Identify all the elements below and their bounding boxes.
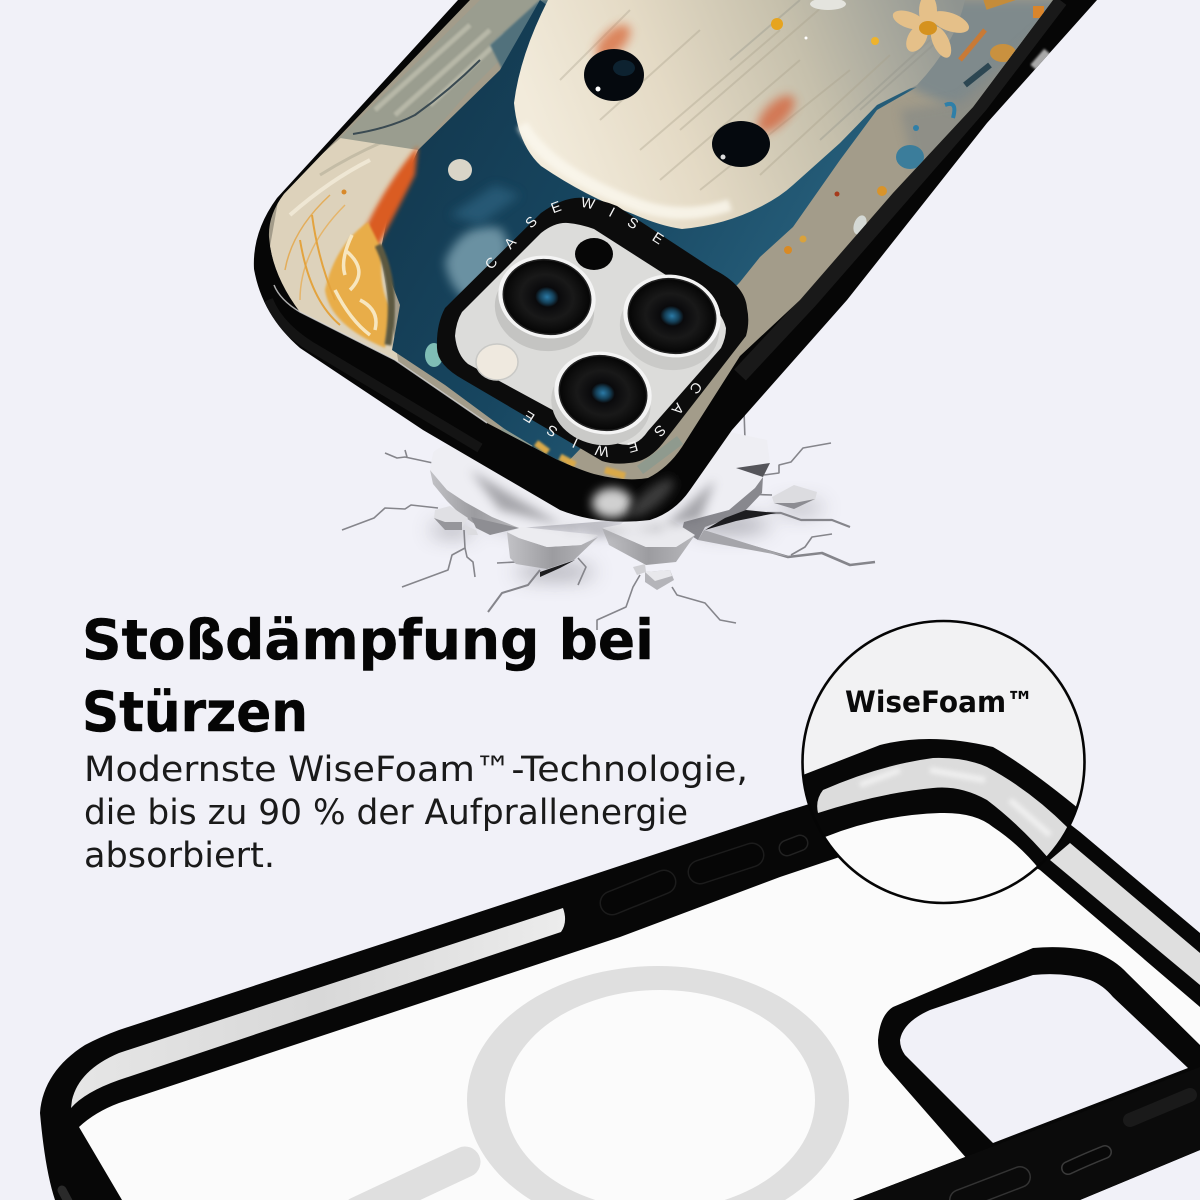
logo text on island: E bbox=[549, 199, 564, 217]
magnifier outline bbox=[802, 621, 1084, 903]
wall impact cracks bbox=[342, 410, 875, 630]
painted artwork bbox=[268, 0, 1053, 480]
lighter teal patch bbox=[445, 227, 508, 300]
body text: absorbiert. bbox=[84, 836, 275, 876]
logo text on island: S bbox=[624, 215, 641, 233]
magnifier callout: WiseFoam bbox=[801, 620, 1086, 904]
camera lens 2 bbox=[612, 266, 729, 379]
logo text on island: A bbox=[668, 400, 686, 417]
logo text on island: I bbox=[570, 434, 581, 450]
phone with painted case and camera bbox=[250, 0, 1100, 523]
logo text on island: W bbox=[594, 441, 610, 459]
MagSafe ring bbox=[467, 966, 849, 1200]
bumper sheen bbox=[268, 0, 1060, 523]
beige fine paint lines bbox=[284, 144, 381, 300]
chunk left bbox=[507, 532, 598, 569]
logo text on island: W bbox=[579, 195, 596, 213]
magnifier fill bbox=[802, 621, 1084, 903]
heading: Stoßdämpfung bei bbox=[82, 608, 654, 672]
case frame bbox=[40, 770, 1200, 1200]
logo text on island: I bbox=[606, 205, 617, 221]
eye glows bbox=[590, 18, 636, 58]
port openings bbox=[62, 1095, 1190, 1200]
chunk right bbox=[602, 528, 695, 565]
logo text on island: E bbox=[626, 437, 639, 455]
crack lines bbox=[342, 410, 875, 630]
orange paint streak bbox=[363, 145, 422, 246]
camera cutout opening bbox=[900, 974, 1188, 1143]
phone contact shadow bbox=[470, 470, 715, 535]
callout label: WiseFoam™ bbox=[845, 685, 1034, 719]
camera lens 1 bbox=[487, 247, 604, 360]
taupe lower right tint bbox=[900, 63, 1006, 170]
logo text on island: E bbox=[649, 229, 666, 248]
dusty upper left bbox=[340, 0, 537, 150]
ghost figure bbox=[514, 0, 965, 229]
logo text on island: S bbox=[523, 214, 541, 232]
body text: Modernste WiseFoam™-Technologie, bbox=[84, 750, 748, 790]
flower and paint dabs bbox=[342, 0, 1044, 476]
eyes bbox=[584, 49, 644, 101]
magnified case corner bbox=[804, 739, 1076, 902]
body text bbox=[84, 750, 748, 876]
soft shadows under chunks bbox=[430, 503, 824, 579]
MagSafe alignment pill bbox=[358, 1162, 465, 1200]
beige left bbox=[270, 138, 418, 362]
microphone hole bbox=[575, 238, 613, 270]
camera cutout frame bbox=[878, 947, 1200, 1160]
clear side band left bbox=[71, 908, 565, 1108]
body text: die bis zu 90 % der Aufprallenergie bbox=[84, 793, 688, 833]
case bumper bbox=[254, 0, 1097, 522]
heading: Stürzen bbox=[82, 680, 308, 744]
logo text on island: E bbox=[521, 407, 538, 425]
flash bbox=[476, 344, 518, 380]
left wall plate bbox=[430, 420, 620, 528]
deep blue field bbox=[380, 0, 917, 470]
camera window bbox=[455, 223, 726, 445]
bottom edge band bbox=[853, 1067, 1200, 1200]
logo text on island: C bbox=[482, 254, 501, 273]
painting edge highlight bbox=[274, 285, 487, 423]
logo text on island: C bbox=[686, 378, 705, 397]
logo text on island: S bbox=[650, 421, 668, 439]
clear side band right bbox=[1050, 843, 1200, 985]
camera island bbox=[437, 198, 748, 464]
logo text on island: A bbox=[502, 234, 520, 253]
logo text on island bbox=[482, 195, 705, 459]
heading bbox=[82, 608, 654, 744]
camera lens 3 bbox=[543, 343, 660, 454]
interior clear back bbox=[79, 820, 1200, 1200]
logo text on island: S bbox=[544, 421, 561, 439]
blue grey upper right bbox=[908, 0, 1053, 106]
right wall plate bbox=[620, 430, 770, 525]
yellow swirl bbox=[325, 222, 392, 348]
side buttons bbox=[612, 843, 800, 903]
clear case back view bbox=[40, 770, 1200, 1200]
small chunks bbox=[645, 570, 674, 590]
ghost under highlight bbox=[522, 125, 730, 213]
ghost brush strokes bbox=[560, 0, 950, 190]
